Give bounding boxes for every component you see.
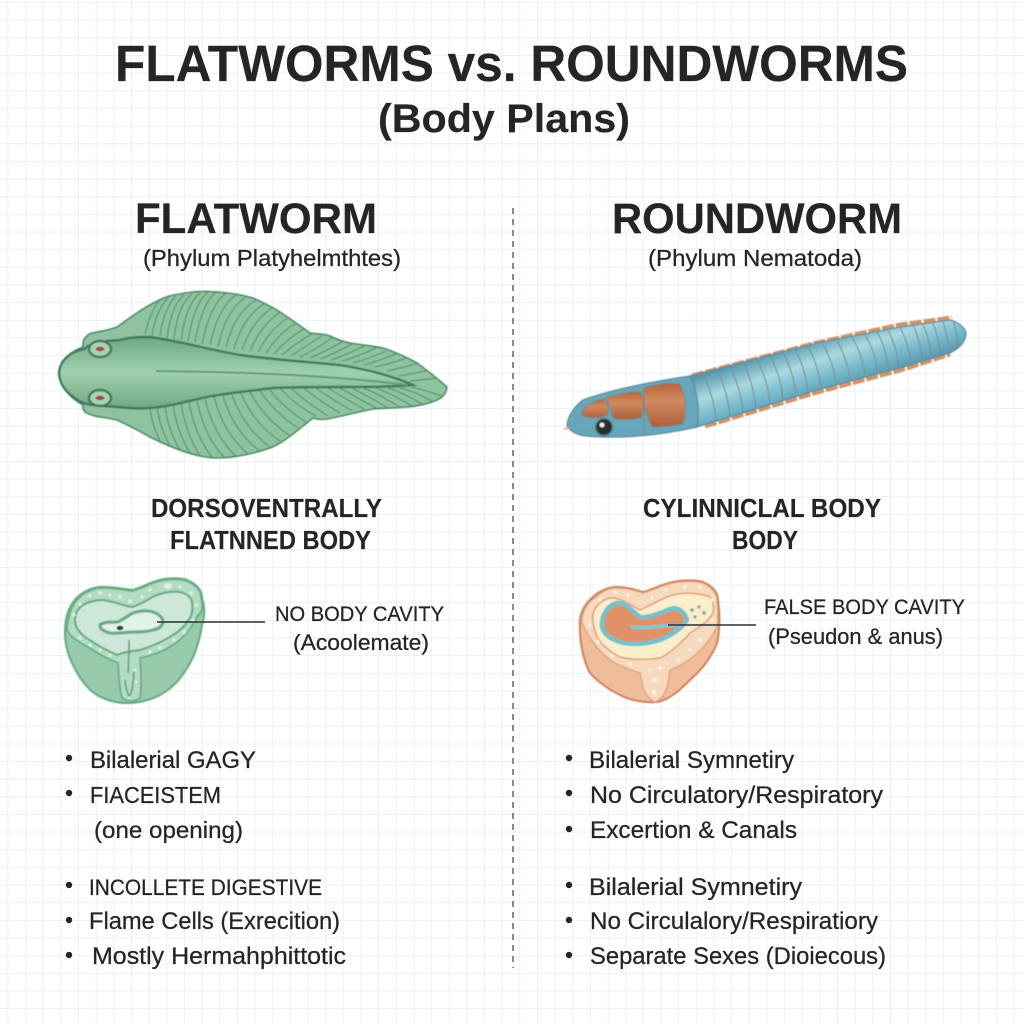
flatworm traits list: (one opening)	[94, 817, 243, 843]
title: (Body Plans)	[378, 97, 630, 141]
flatworm traits list: Flame Cells (Exrecition)	[89, 908, 340, 935]
gut	[100, 611, 163, 633]
flatworm eyes	[89, 341, 111, 406]
body segments	[703, 321, 957, 421]
cell layer	[67, 580, 202, 701]
flatworm central body	[59, 337, 413, 408]
cell layer	[582, 582, 718, 702]
pseudocoelomate label	[764, 596, 965, 649]
roundworm heading	[612, 195, 902, 271]
flatworm body label: FLATNNED BODY	[170, 525, 371, 555]
acoelomate label: NO BODY CAVITY	[275, 603, 444, 626]
cavity	[75, 592, 192, 655]
acoelomate label	[275, 603, 444, 655]
flatworm traits list: INCOLLETE DIGESTIVE	[89, 875, 322, 900]
pharynx lines	[125, 640, 134, 696]
flatworm traits list: Bilalerial GAGY	[90, 747, 256, 774]
roundworm body label: BODY	[732, 525, 798, 555]
acoelomate label: (Acoolemate)	[293, 630, 429, 655]
eye	[596, 418, 612, 436]
dots	[588, 585, 714, 694]
roundworm body label	[643, 493, 881, 555]
roundworm traits list: Bilalerial Symnetiry	[589, 747, 794, 774]
roundworm traits list: No Circulatory/Respiratory	[590, 782, 883, 809]
false body cavity	[593, 593, 714, 659]
center divider	[512, 208, 514, 968]
flatworm heading	[135, 195, 401, 271]
panel: roundworm	[564, 195, 966, 970]
flatworm heading: (Phylum Platyhelmthtes)	[143, 245, 401, 271]
head divider	[644, 378, 698, 436]
flatworm traits list: Mostly Hermahphittotic	[92, 943, 346, 970]
flatworm body label	[151, 493, 382, 555]
roundworm heading: (Phylum Nematoda)	[648, 245, 862, 271]
inner canal	[632, 626, 680, 627]
cavity pointer	[668, 624, 756, 626]
gut	[602, 603, 687, 644]
bristle fringe	[692, 318, 952, 426]
illustration: flatworm	[59, 291, 447, 458]
worm body	[690, 320, 966, 427]
flatworm midline	[156, 371, 408, 385]
pseudocoelomate label: (Pseudon & anus)	[768, 624, 943, 649]
title	[115, 35, 908, 141]
roundworm body label: CYLINNICLAL BODY	[643, 493, 881, 523]
head	[567, 376, 698, 437]
illustration: roundworm	[564, 318, 966, 437]
flatworm traits list: FIACEISTEM	[90, 782, 221, 808]
roundworm traits list: Bilalerial Symnetiry	[589, 874, 802, 901]
mouth tip	[564, 428, 570, 429]
flatworm body label: DORSOVENTRALLY	[151, 493, 382, 523]
roundworm traits list: Separate Sexes (Dioiecous)	[590, 943, 886, 970]
flatworm ribs upper	[145, 292, 436, 381]
brown patches	[582, 383, 685, 427]
cell dots	[72, 583, 198, 699]
roundworm heading: ROUNDWORM	[612, 195, 902, 243]
roundworm traits list	[566, 747, 886, 970]
flatworm heading: FLATWORM	[135, 195, 377, 243]
title: FLATWORMS vs. ROUNDWORMS	[115, 35, 908, 92]
panel: flatworm	[59, 195, 447, 970]
cavity pointer	[157, 621, 265, 623]
illustration: acoelomate cross-section	[65, 578, 204, 703]
flatworm ribs lower	[150, 387, 442, 457]
pseudocoelomate label: FALSE BODY CAVITY	[764, 596, 965, 619]
roundworm traits list: Excertion & Canals	[590, 817, 797, 844]
roundworm traits list: No Circulalory/Respiratiory	[590, 908, 878, 935]
illustration: pseudocoelomate cross-section	[580, 580, 719, 702]
flatworm traits list	[66, 747, 346, 970]
